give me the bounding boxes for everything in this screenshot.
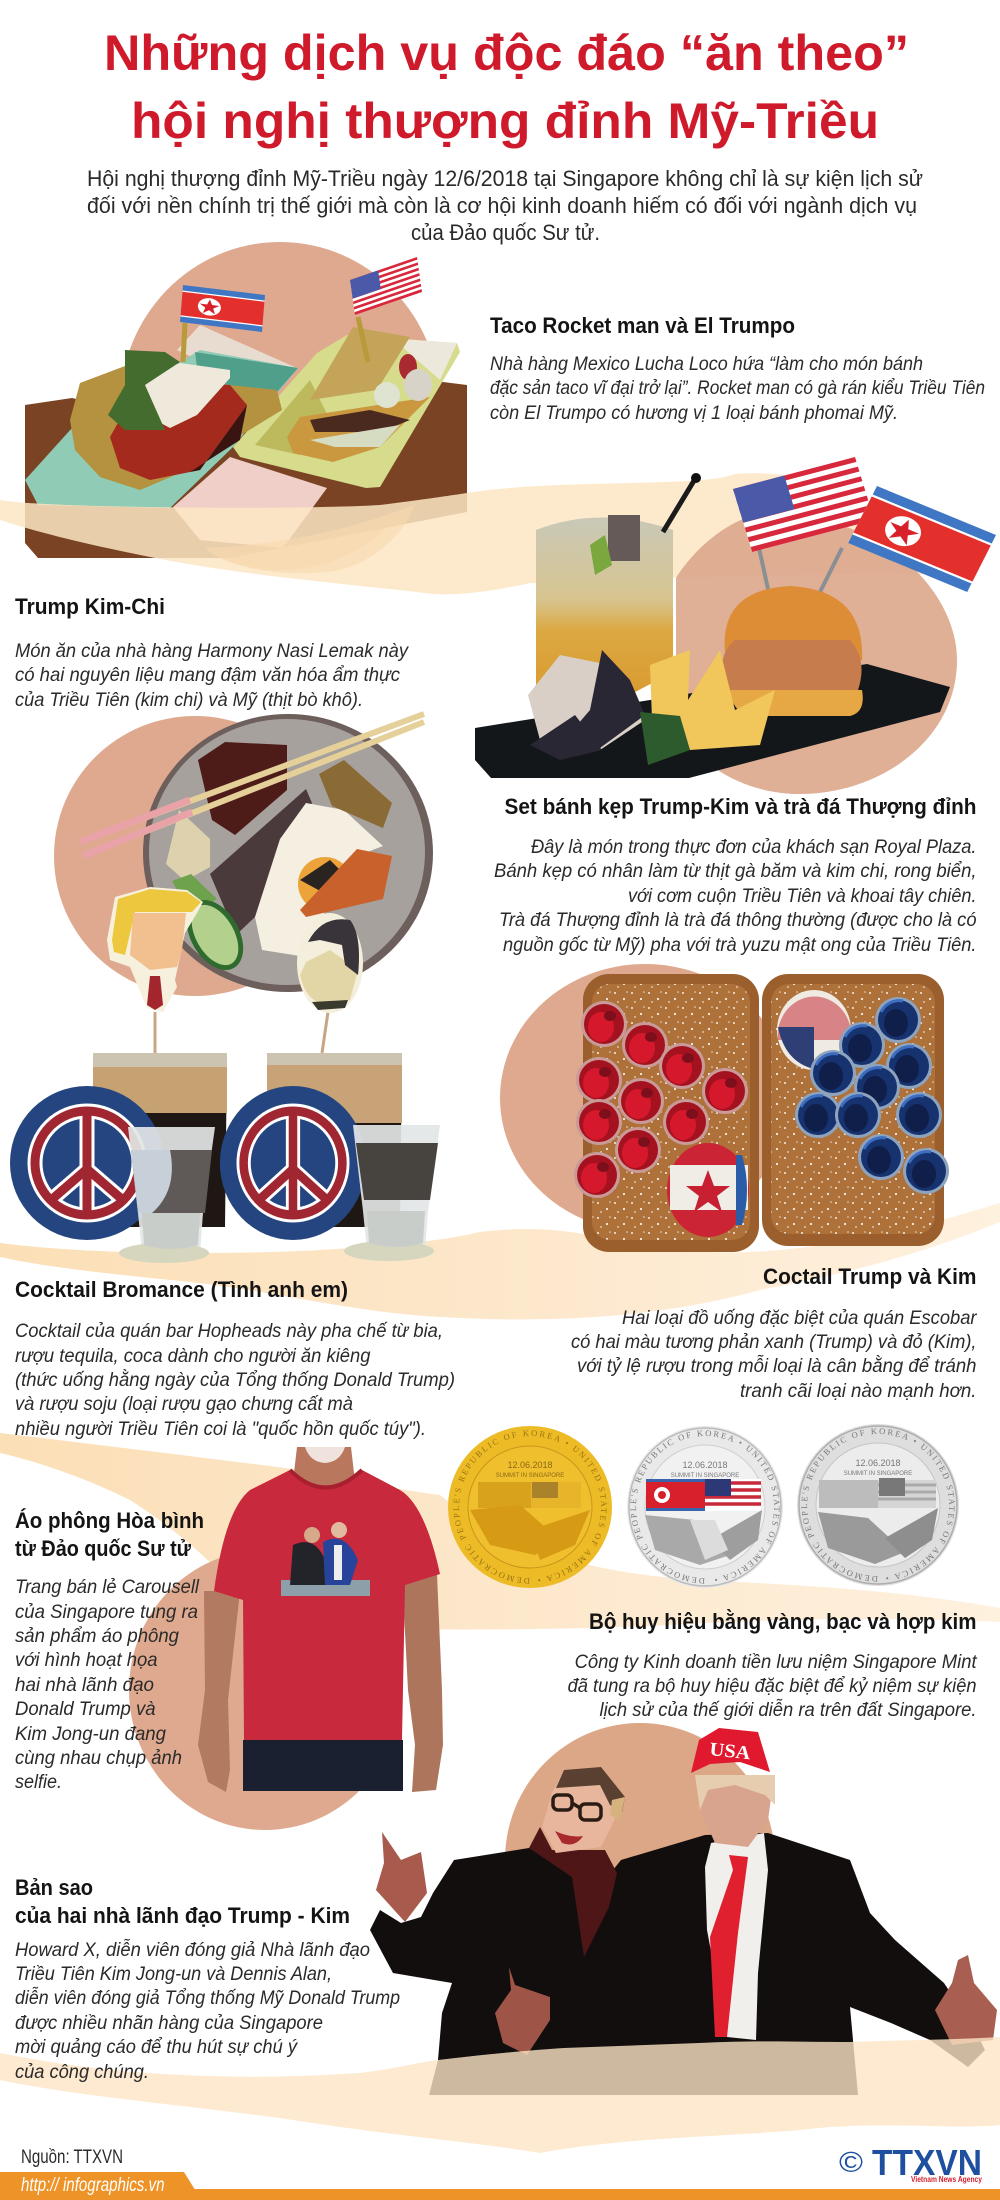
text: coins [568,1651,978,1721]
icon: selfie cartoon print [281,1522,370,1596]
logo: TTXVN: Vietnam News Agency [911,2175,982,2184]
text: t-shirt: hai nhà lãnh đạo [15,1674,154,1696]
text: t-shirt: cùng nhau chụp ảnh [15,1747,182,1769]
photo: Kim and Trump lookalikes [370,1728,997,2095]
heading: burger set: Set bánh kẹp Trump-Kim và trà đá Thượng đỉnh [504,794,976,819]
icon: right soju shot [344,1125,440,1261]
text: burger set: nguồn gốc từ Mỹ) pha với trà yuzu mật ong của Triều Tiên. [503,934,976,956]
text: cocktail bromance [15,1320,455,1440]
intro text: đối với nền chính trị thế giới mà còn là cơ hội kinh doanh hiếm có đối với ngành dịch vụ [87,193,917,218]
intro text: Hội nghị thượng đỉnh Mỹ-Triều ngày 12/6/2018 tại Singapore không chỉ là sự kiện lịch sử [87,166,923,191]
heading: cocktail bromance: Cocktail Bromance (Tình anh em) [15,1277,348,1302]
blob: burger backdrop [676,512,957,794]
text: cocktail trump kim: với tỷ lệ rượu trong mỗi loại là cân bằng để tránh [577,1354,976,1377]
icon: gold coin: DEMOCRATIC PEOPLE'S REPUBLIC OF KOREA • UNITED STATES OF AMERICA • [454,1430,607,1584]
footer bar [0,2172,1000,2200]
text: t-shirt: Kim Jong-un đang [15,1723,166,1745]
logo: TTXVN: © [839,2147,863,2179]
text: cocktail trump kim: có hai màu tương phản xanh (Trump) và đỏ (Kim), [571,1331,976,1353]
text: lookalikes: của công chúng. [15,2061,149,2083]
text: taco: còn El Trumpo có hương vị 1 loại bánh phomai Mỹ. [490,402,898,424]
icon: US flag coaster [777,990,851,1070]
icon: silver alloy coin: 12.06.2018 [855,1458,901,1468]
heading: t-shirt: Áo phông Hòa bình [15,1508,204,1533]
heading: trump kim-chi: Trump Kim-Chi [15,594,165,619]
text: cocktail bromance: Cocktail của quán bar Hopheads này pha chế từ bia, [15,1320,443,1342]
text: lookalikes: được nhiều nhãn hàng của Singapore [15,2012,323,2034]
panel: cocktail trump kim [500,964,978,1402]
heading: t-shirt [15,1508,204,1561]
title: Những dịch vụ độc đáo “ăn theo” [104,25,909,81]
wave: bottom cream band [0,2037,1000,2153]
icon: NK flag coaster [667,1143,749,1237]
panel: t-shirt [15,1447,443,1830]
photo: red and blue shot trays [574,974,949,1252]
text: t-shirt: selfie. [15,1771,62,1793]
heading: t-shirt: từ Đảo quốc Sư tử [15,1536,191,1561]
heading: cocktail trump kim: Coctail Trump và Kim [763,1264,976,1289]
blob: cocktail backdrop [500,964,790,1232]
text: burger set [494,836,977,956]
panel: cocktail bromance [10,1053,455,1440]
intro text: của Đảo quốc Sư tử. [411,220,600,245]
source note: Nguồn: TTXVN [21,2146,123,2168]
text: cocktail bromance: và rượu soju (loại rượu gạo chưng cất mà [15,1393,353,1415]
text: cocktail trump kim [571,1307,978,1402]
photo: red t-shirt with cartoon [198,1447,443,1792]
text: burger set: Trà đá Thượng đỉnh là trà đá thông thường (được cho là có [499,909,977,931]
panel: trump kim-chi [15,594,433,1053]
text: t-shirt: với hình hoạt họa [15,1649,158,1671]
text: cocktail bromance: (thức uống hằng ngày của Tổng thống Donald Trump) [15,1368,455,1391]
icon: gold coin: SUMMIT IN SINGAPORE [496,1473,564,1479]
heading: lookalikes: Bản sao [15,1875,93,1900]
panel: taco text [490,313,985,424]
text: t-shirt [15,1576,200,1793]
background wave: lower cream band [0,1433,1000,1629]
footer bar: http:// infographics.vn [21,2174,164,2196]
text: lookalikes [15,1938,400,2083]
text: cocktail trump kim: Hai loại đồ uống đặc biệt của quán Escobar [622,1307,978,1329]
text: trump kim-chi: có hai nguyên liệu mang đậm văn hóa ẩm thực [15,664,400,686]
title [104,25,909,149]
panel: taco [25,242,467,570]
text: taco: Nhà hàng Mexico Lucha Loco hứa “làm cho món bánh [490,353,923,375]
text: burger set: Bánh kẹp có nhân làm từ thịt gà băm và kim chi, rong biển, [494,860,976,882]
photo: taco plates and flags [25,257,467,558]
text: lookalikes: Triều Tiên Kim Jong-un và Dennis Alan, [15,1963,332,1985]
text: lookalikes: Howard X, diễn viên đóng giả Nhà lãnh đạo [15,1938,370,1961]
text: trump kim-chi: Món ăn của nhà hàng Harmony Nasi Lemak này [15,640,409,662]
icon: kim cartoon pick [297,913,363,1053]
text: lookalikes: mời quảng cáo để thu hút sự chú ý [15,2036,298,2058]
logo: TTXVN: TTXVN [872,2142,982,2183]
icon: silver coin with colour flags: 12.06.2018 [682,1460,728,1470]
heading: lookalikes [15,1875,350,1928]
icon: silver coin with colour flags: SUMMIT IN SINGAPORE [671,1473,739,1479]
icon: silver coin with colour flags: DEMOCRATIC PEOPLE'S REPUBLIC OF KOREA • UNITED STATES OF AMERICA • [630,1430,780,1584]
text: coins: lịch sử của thế giới diễn ra trên đất Singapore. [600,1698,976,1721]
blob: bowl backdrop [54,716,336,996]
text: t-shirt: Donald Trump và [15,1698,156,1720]
photo: bibimbap bowl [80,714,433,992]
icon: trump cartoon pick [107,887,203,1053]
text: coins: đã tung ra bộ huy hiệu đặc biệt để kỷ niệm sự kiện [568,1675,977,1697]
text: t-shirt: sản phẩm áo phông [15,1625,179,1647]
heading: lookalikes: của hai nhà lãnh đạo Trump - Kim [15,1903,350,1928]
blob: lookalikes backdrop [505,1723,775,1997]
text: lookalikes: diễn viên đóng giả Tổng thống Mỹ Donald Trump [15,1986,400,2009]
text: coins: Công ty Kinh doanh tiền lưu niệm Singapore Mint [575,1651,978,1673]
text: t-shirt: của Singapore tung ra [15,1601,198,1623]
text: cocktail trump kim: tranh cãi loại nào mạnh hơn. [740,1380,976,1402]
text: cocktail bromance: rượu tequila, coca dành cho người ăn kiêng [15,1345,371,1367]
text: trump kim-chi [15,640,409,711]
heading: taco: Taco Rocket man và El Trumpo [490,313,795,338]
background wave: middle cream band [0,1203,1000,1319]
photo: Kim and Trump lookalikes: USA [708,1739,752,1764]
icon: left soju shot [119,1127,215,1263]
panel: coins [448,1424,978,1721]
text: t-shirt: Trang bán lẻ Carousell [15,1576,200,1598]
photo: drink, burger, fries and flags [475,457,996,778]
text: burger set: với cơm cuộn Triều Tiên và khoai tây chiên. [628,885,976,907]
text: taco [490,353,985,424]
panel: lookalikes [0,1723,1000,2153]
text: cocktail bromance: nhiều người Triều Tiên coi là "quốc hồn quốc túy"). [15,1418,426,1440]
text: burger set: Đây là món trong thực đơn của khách sạn Royal Plaza. [531,836,976,858]
heading: coins: Bộ huy hiệu bằng vàng, bạc và hợp kim [589,1609,976,1634]
wave: top cream band over taco [0,473,960,594]
photo: beer glasses, peace coasters and soju shots [10,1053,440,1263]
text: trump kim-chi: của Triều Tiên (kim chi) và Mỹ (thịt bò khô). [15,689,363,711]
icon: gold coin: 12.06.2018 [507,1460,553,1470]
blob: t-shirt backdrop [129,1550,401,1830]
title: hội nghị thượng đỉnh Mỹ-Triều [131,93,879,149]
intro text [87,166,923,245]
icon: silver alloy coin: DEMOCRATIC PEOPLE'S REPUBLIC OF KOREA • UNITED STATES OF AMERICA • [802,1428,955,1582]
blob: taco backdrop [120,242,440,570]
panel: burger set [475,457,996,956]
icon: silver alloy coin: SUMMIT IN SINGAPORE [844,1471,912,1477]
